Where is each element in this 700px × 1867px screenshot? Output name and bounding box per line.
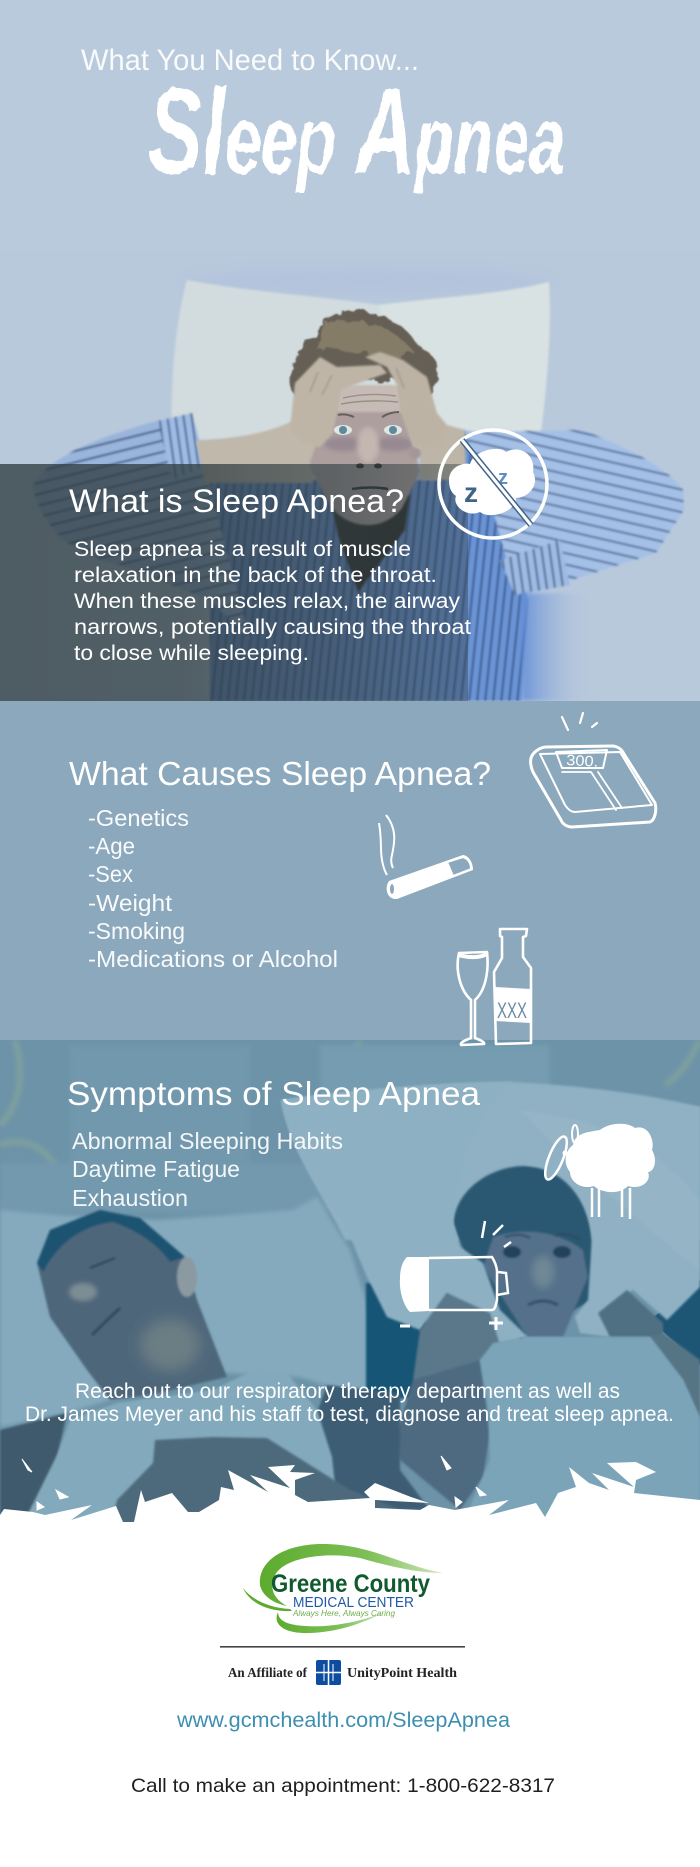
icon: low battery (400, 1221, 511, 1330)
list: symptoms: Daytime Fatigue (72, 1156, 240, 1182)
icon: scale: 300. (566, 752, 599, 771)
neck (330, 495, 410, 592)
woman's hands and arm (397, 1290, 700, 1510)
pillow behind woman's head (281, 1082, 700, 1240)
hair (289, 310, 439, 398)
text block: definition (74, 537, 471, 665)
icon: no sleep: z (464, 477, 478, 508)
dark gap beside woman's pillow (366, 1283, 426, 1398)
text block: definition: to close while sleeping. (74, 641, 309, 665)
torn white edge (0, 1462, 700, 1530)
list: causes: -Sex (88, 861, 133, 887)
panel: hero photo of man awake in bed (0, 0, 700, 701)
panel: symptoms photo of couple in bed (0, 1040, 700, 1540)
man's shirt (28, 1374, 336, 1520)
title: What You Need to Know: What You Need to Know... (81, 44, 419, 77)
icon: no sleep: z (498, 467, 508, 489)
text block: definition: relaxation in the back of the throat. (74, 563, 437, 587)
panel: causes background (0, 701, 700, 1040)
list: causes: -Genetics (88, 805, 189, 831)
white flecks (22, 1456, 486, 1510)
right dark gap (650, 1280, 700, 1365)
affiliate line (228, 1660, 457, 1685)
divider line (220, 1646, 465, 1648)
woman's hair (453, 1166, 592, 1340)
icon: cigarette (379, 815, 473, 899)
shirt and sleeves (33, 413, 684, 701)
list: causes (88, 805, 338, 972)
left dark area (0, 1412, 68, 1515)
logo: Greene County Medical Center: MEDICAL CENTER (293, 1594, 414, 1611)
text block: call to action (25, 1380, 674, 1426)
list: symptoms: Exhaustion (72, 1185, 188, 1211)
pillow (172, 280, 550, 440)
heading: What is Sleep Apnea: What is Sleep Apnea? (69, 483, 404, 519)
eyes, wrinkles and nose (334, 394, 402, 489)
right duvet (470, 1336, 700, 1516)
icon: wine glass and bottle (458, 929, 531, 1045)
text block: definition: narrows, potentially causing the throat (74, 615, 471, 639)
headboard (46, 1164, 253, 1168)
list: symptoms (72, 1128, 343, 1211)
affiliate line: UnityPoint Health (347, 1666, 457, 1681)
icon: no sleep (439, 430, 547, 538)
man's arm (114, 1436, 396, 1522)
text block: call to action: Dr. James Meyer and his staff to test, diagnose and treat sleep apnea. (25, 1403, 674, 1426)
website link: www.gcmchealth.com/SleepApnea (176, 1709, 510, 1732)
phone number: Call to make an appointment: 1-800-622-8317 (131, 1775, 555, 1797)
logo: Greene County Medical Center: Always Here, Always Caring (292, 1608, 395, 1618)
wall shapes (0, 1040, 700, 1165)
heading: What Causes Sleep Apnea: What Causes Sleep Apnea? (69, 755, 491, 792)
hands (290, 352, 447, 448)
man's head (37, 1210, 227, 1400)
forearms (196, 420, 466, 483)
logo: Greene County Medical Center: Greene County (271, 1570, 430, 1598)
woman's pillows (351, 1110, 700, 1342)
text block: definition: When these muscles relax, the airway (74, 589, 460, 613)
dark text panel overlay (0, 464, 468, 701)
title: Sleep Apnea: Sleep Apnea (148, 63, 565, 199)
list: symptoms: Abnormal Sleeping Habits (72, 1128, 343, 1154)
woman's face (483, 1231, 588, 1337)
list: causes: -Medications or Alcohol (88, 946, 338, 972)
icon: wine glass and bottle: XXX (497, 998, 527, 1023)
man's pillow (0, 1197, 372, 1427)
affiliate line: An Affiliate of (228, 1666, 307, 1681)
list: causes: -Weight (88, 890, 173, 916)
heading: Symptoms of Sleep Apnea: Symptoms of Sleep Apnea (67, 1075, 481, 1112)
face (310, 385, 421, 525)
icon: sheep (541, 1124, 655, 1219)
list: causes: -Age (88, 833, 135, 859)
list: causes: -Smoking (88, 918, 185, 944)
text block: definition: Sleep apnea is a result of muscle (74, 537, 411, 561)
logo: Greene County Medical Center (243, 1544, 443, 1633)
icon: scale (531, 713, 656, 827)
text block: call to action: Reach out to our respiratory therapy department as well as (75, 1380, 620, 1403)
man's far arm (317, 1384, 428, 1510)
